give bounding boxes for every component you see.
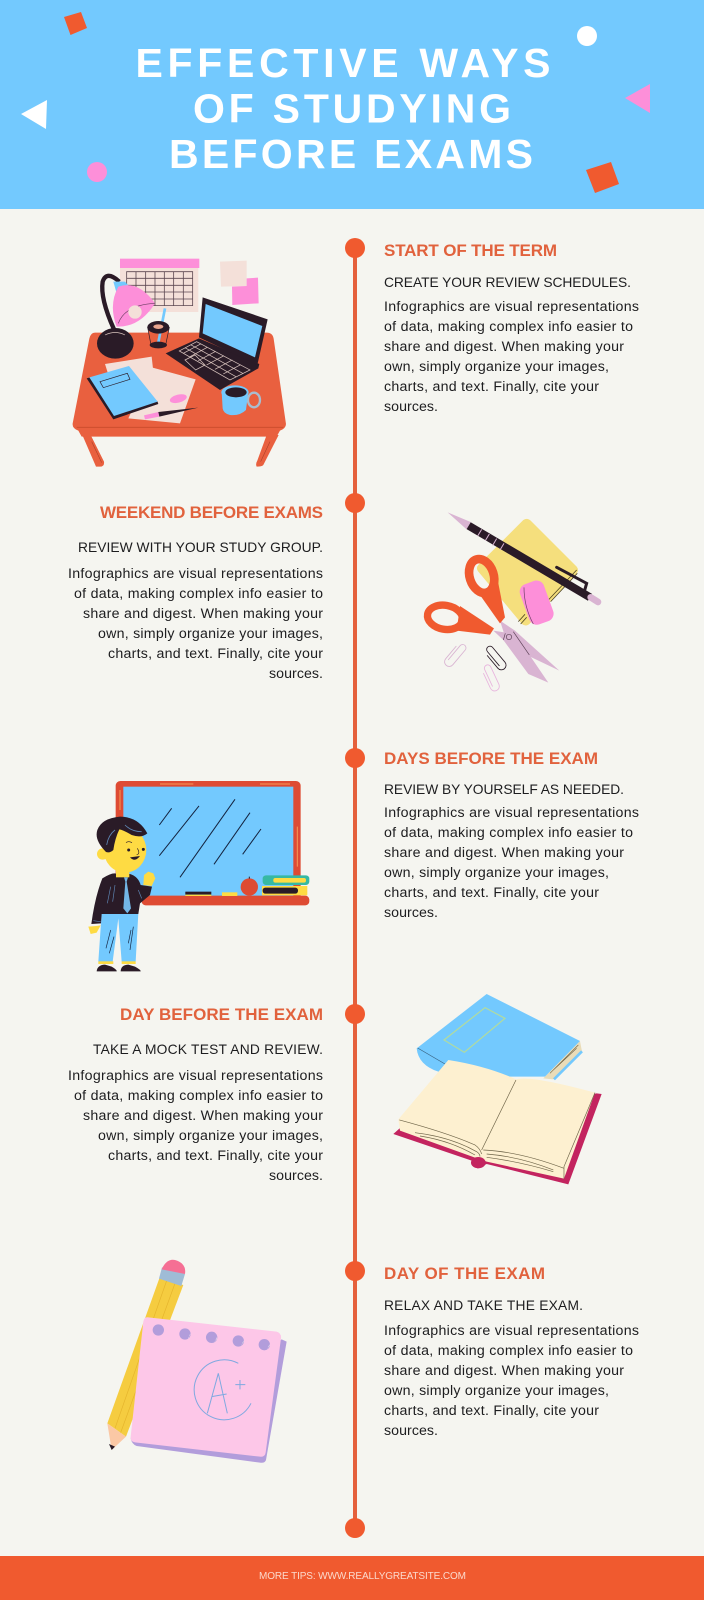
text block: weekend before exams: REVIEW WITH YOUR STUDY GROUP. <box>78 540 323 555</box>
text block: days before the exam: own, simply organize your images, <box>384 865 609 881</box>
footer bar <box>0 1556 704 1600</box>
footer text: MORE TIPS: WWW.REALLYGREATSITE.COM <box>259 1571 466 1582</box>
yellow notepad <box>477 519 578 626</box>
text block: weekend before exams: sources. <box>269 666 323 682</box>
pen <box>144 408 198 419</box>
title <box>136 40 550 177</box>
text block: days before the exam: DAYS BEFORE THE EXAM <box>384 749 598 768</box>
text block: weekend before exams: of data, making complex info easier to <box>74 586 323 602</box>
icon: study desk illustration <box>73 259 286 467</box>
text block: day of the exam: DAY OF THE EXAM <box>384 1264 545 1283</box>
sticky notes <box>220 261 259 305</box>
blackboard <box>116 781 309 905</box>
icon: pink circle <box>87 162 107 182</box>
papers <box>105 357 196 423</box>
text block: days before the exam <box>384 749 639 921</box>
icon: graded paper and pencil illustration <box>107 1260 287 1463</box>
text block: day of the exam: own, simply organize your images, <box>384 1383 609 1399</box>
text block: weekend before exams: WEEKEND BEFORE EXAMS <box>100 503 323 522</box>
text block: day of the exam: share and digest. When making your <box>384 1363 624 1379</box>
text block: day of the exam: RELAX AND TAKE THE EXAM. <box>384 1298 583 1313</box>
text block: day before the exam: of data, making complex info easier to <box>74 1088 323 1104</box>
title: OF STUDYING <box>193 86 511 132</box>
notebook <box>87 366 158 419</box>
text block: days before the exam: share and digest. When making your <box>384 845 624 861</box>
text block: start of the term: sources. <box>384 399 438 415</box>
header banner <box>0 0 704 209</box>
mug <box>221 385 260 415</box>
scissors <box>426 556 559 683</box>
stack of books <box>262 875 309 895</box>
apple <box>241 877 258 896</box>
text block: start of the term: own, simply organize your images, <box>384 359 609 375</box>
icon: stationery illustration <box>426 512 598 692</box>
title: BEFORE EXAMS <box>169 131 533 177</box>
paper clips <box>443 641 508 692</box>
icon: pink triangle <box>625 84 650 113</box>
text block: start of the term: of data, making complex info easier to <box>384 319 633 335</box>
pencil <box>107 1260 185 1450</box>
text block: day before the exam: charts, and text. Finally, cite your <box>108 1148 323 1164</box>
laptop <box>166 297 268 390</box>
student <box>88 817 155 971</box>
icon: white triangle <box>21 100 47 129</box>
text block: start of the term: START OF THE TERM <box>384 241 557 260</box>
text block: day before the exam: DAY BEFORE THE EXAM <box>120 1005 323 1024</box>
open book <box>393 1060 602 1184</box>
icon: orange square bottom right <box>586 162 619 193</box>
text block: weekend before exams: own, simply organize your images, <box>98 626 323 642</box>
eraser <box>169 393 188 405</box>
desk lamp <box>97 276 155 359</box>
text block: weekend before exams <box>68 503 323 682</box>
icon: orange square top left <box>64 12 87 35</box>
text block: days before the exam: sources. <box>384 905 438 921</box>
calendar <box>120 259 199 312</box>
text block: day of the exam <box>384 1264 639 1439</box>
text block: day of the exam: of data, making complex info easier to <box>384 1343 633 1359</box>
text block: weekend before exams: Infographics are visual representations <box>68 566 323 582</box>
binder holes <box>153 1324 270 1351</box>
closed blue book <box>417 994 582 1079</box>
desk <box>73 333 286 467</box>
text block: day of the exam: charts, and text. Finally, cite your <box>384 1403 599 1419</box>
text block: day before the exam: Infographics are visual representations <box>68 1068 323 1084</box>
text block: days before the exam: Infographics are visual representations <box>384 805 639 821</box>
text block: start of the term <box>384 241 639 415</box>
icon: blackboard and student illustration <box>88 781 309 971</box>
text block: weekend before exams: charts, and text. Finally, cite your <box>108 646 323 662</box>
title: EFFECTIVE WAYS <box>136 40 550 86</box>
icon: white circle <box>577 26 597 46</box>
text block: weekend before exams: share and digest. When making your <box>83 606 323 622</box>
eraser <box>517 578 556 627</box>
text block: day before the exam: sources. <box>269 1168 323 1184</box>
text block: day before the exam: own, simply organize your images, <box>98 1128 323 1144</box>
pen holder <box>147 308 169 348</box>
text block: start of the term: charts, and text. Finally, cite your <box>384 379 599 395</box>
icon: books illustration <box>393 994 602 1184</box>
pencil <box>448 512 598 602</box>
text block: day of the exam: sources. <box>384 1423 438 1439</box>
text block: start of the term: Infographics are visual representations <box>384 299 639 315</box>
text block: days before the exam: of data, making complex info easier to <box>384 825 633 841</box>
text block: day before the exam <box>68 1005 323 1184</box>
chalk and eraser <box>185 892 237 896</box>
pink note <box>131 1317 281 1457</box>
text block: day before the exam: share and digest. When making your <box>83 1108 323 1124</box>
A plus grade mark <box>194 1360 251 1420</box>
text block: days before the exam: charts, and text. Finally, cite your <box>384 885 599 901</box>
text block: day of the exam: Infographics are visual representations <box>384 1323 639 1339</box>
text block: start of the term: share and digest. When making your <box>384 339 624 355</box>
text block: day before the exam: TAKE A MOCK TEST AND REVIEW. <box>93 1042 323 1057</box>
timeline spine <box>345 238 365 1538</box>
purple backing <box>131 1339 287 1463</box>
text block: start of the term: CREATE YOUR REVIEW SCHEDULES. <box>384 275 631 290</box>
text block: days before the exam: REVIEW BY YOURSELF AS NEEDED. <box>384 782 624 797</box>
